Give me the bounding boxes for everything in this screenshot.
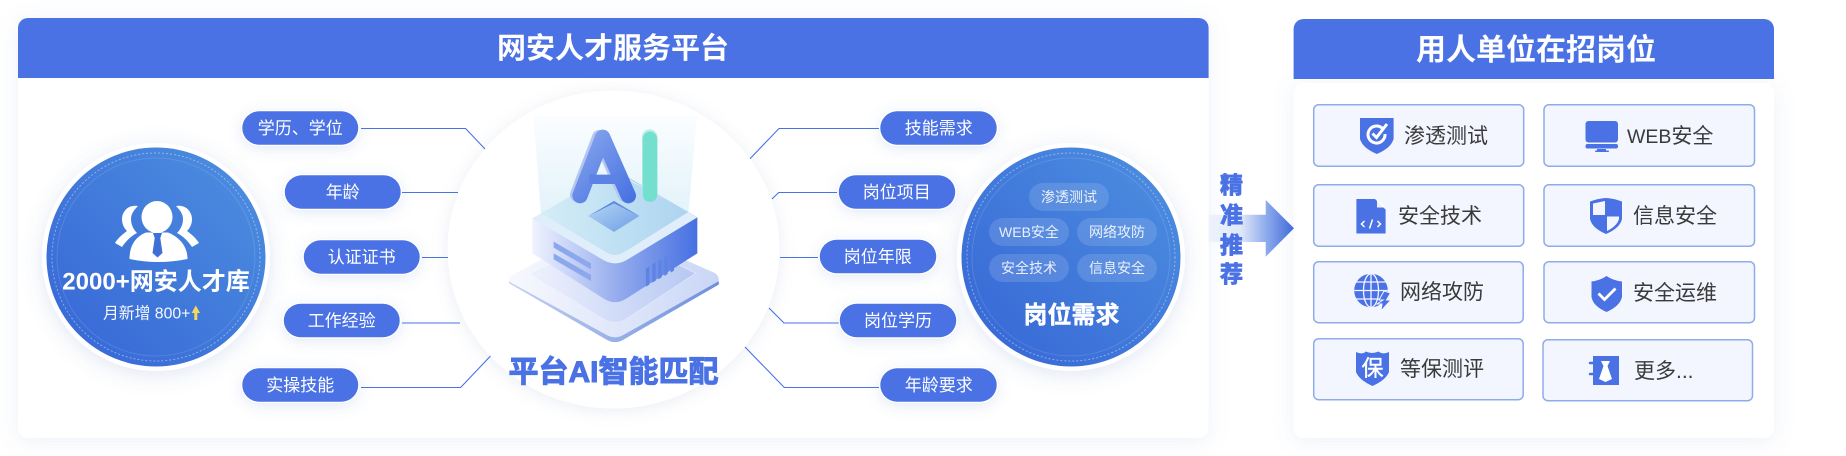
chip: information security: 信息安全 <box>1089 260 1145 276</box>
pill: position education: 岗位学历 <box>864 312 932 330</box>
circle: talent pool <box>42 143 270 371</box>
circle: position demand <box>957 143 1185 371</box>
chip: information security <box>1077 254 1157 282</box>
letter A <box>577 137 628 196</box>
card: security technology <box>1314 185 1524 246</box>
letter I <box>642 129 657 202</box>
pill: work experience: 工作经验 <box>308 312 376 330</box>
card: security operations: 安全运维 <box>1633 282 1717 305</box>
text: precise recommendation: 精 <box>1220 172 1243 198</box>
card: information security <box>1544 185 1754 246</box>
base plate <box>509 225 719 342</box>
icon: monitor <box>1586 121 1618 152</box>
pill: education <box>241 110 360 146</box>
card: more: 更多... <box>1634 360 1694 383</box>
card: security technology: 安全技术 <box>1398 205 1482 228</box>
heading bar: platform <box>18 18 1209 78</box>
pill: certificates: 认证证书 <box>328 248 396 267</box>
card: penetration testing <box>1314 105 1524 166</box>
pill: practical skills: 实操技能 <box>266 376 334 395</box>
label: position demand: 岗位需求 <box>1024 301 1120 329</box>
pill: skill requirement: 技能需求 <box>905 119 973 138</box>
illustration: AI server <box>509 116 719 342</box>
text: precise recommendation: 推 <box>1220 232 1243 258</box>
connector lines: right <box>745 128 879 388</box>
arrow: recommendation <box>1209 200 1294 257</box>
pill: position years <box>818 238 938 274</box>
pill: age <box>284 174 402 210</box>
icon: check shield <box>1592 276 1622 312</box>
chip: penetration testing <box>1029 183 1109 211</box>
heading bar: platform: 网安人才服务平台 <box>497 31 729 65</box>
central circle background <box>448 90 780 408</box>
chip: network attack defense: 网络攻防 <box>1089 224 1145 240</box>
chip: network attack defense <box>1077 218 1157 246</box>
icon: quartered shield <box>1590 198 1622 234</box>
pill: practical skills <box>241 367 360 403</box>
server box <box>532 170 697 302</box>
card: web security: WEB安全 <box>1627 125 1713 148</box>
chip: security tech: 安全技术 <box>1001 260 1057 276</box>
card: classified protection assessment <box>1314 339 1523 400</box>
text: precise recommendation <box>1220 172 1243 287</box>
icon: code file <box>1356 199 1386 234</box>
connector lines: left <box>361 128 490 388</box>
card: information security: 信息安全 <box>1633 205 1717 228</box>
pill: age: 年龄 <box>326 183 360 202</box>
card: penetration testing: 渗透测试 <box>1404 125 1488 148</box>
chip: web security <box>989 218 1069 246</box>
icon: bao badge <box>1356 352 1389 386</box>
chip: security tech <box>989 254 1069 282</box>
pill: work experience <box>282 302 401 338</box>
icon: globe with bolt <box>1354 274 1391 311</box>
heading bar: positions <box>1294 19 1774 79</box>
chip: penetration testing: 渗透测试 <box>1041 189 1097 205</box>
pill: certificates <box>302 239 421 275</box>
card: network attack defense <box>1314 262 1523 323</box>
count text: 2000+网安人才库 <box>62 268 250 296</box>
text: precise recommendation: 荐 <box>1220 261 1243 287</box>
card: classified protection assessment: 等保测评 <box>1400 358 1484 381</box>
panel: hiring positions <box>1294 19 1774 438</box>
pill: age requirement: 年龄要求 <box>905 376 973 395</box>
pill: position projects: 岗位项目 <box>863 183 931 202</box>
icon: target shield <box>1360 118 1394 154</box>
card: network attack defense: 网络攻防 <box>1400 281 1484 304</box>
pill: position education <box>838 302 958 338</box>
heading bar: positions: 用人单位在招岗位 <box>1416 33 1656 67</box>
card: web security <box>1544 105 1754 166</box>
pill: education: 学历、学位 <box>258 119 343 138</box>
pill: age requirement <box>879 367 998 403</box>
pill: position years: 岗位年限 <box>844 248 912 266</box>
light beam <box>533 116 697 253</box>
center title: 平台AI智能匹配 <box>508 355 718 389</box>
panel: talent service platform <box>18 18 1209 438</box>
chip: web security: WEB安全 <box>999 224 1059 240</box>
text: precise recommendation: 准 <box>1220 202 1243 228</box>
monthly growth text: 月新增 800+ <box>103 304 190 322</box>
icon: people with tie <box>115 201 199 262</box>
card: security operations <box>1544 262 1754 323</box>
icon: bao badge: 保 <box>1361 356 1384 381</box>
icon: notebook with tie <box>1590 356 1619 385</box>
pill: skill requirement <box>879 110 998 146</box>
pill: position projects <box>838 174 956 210</box>
card: more <box>1543 340 1752 401</box>
